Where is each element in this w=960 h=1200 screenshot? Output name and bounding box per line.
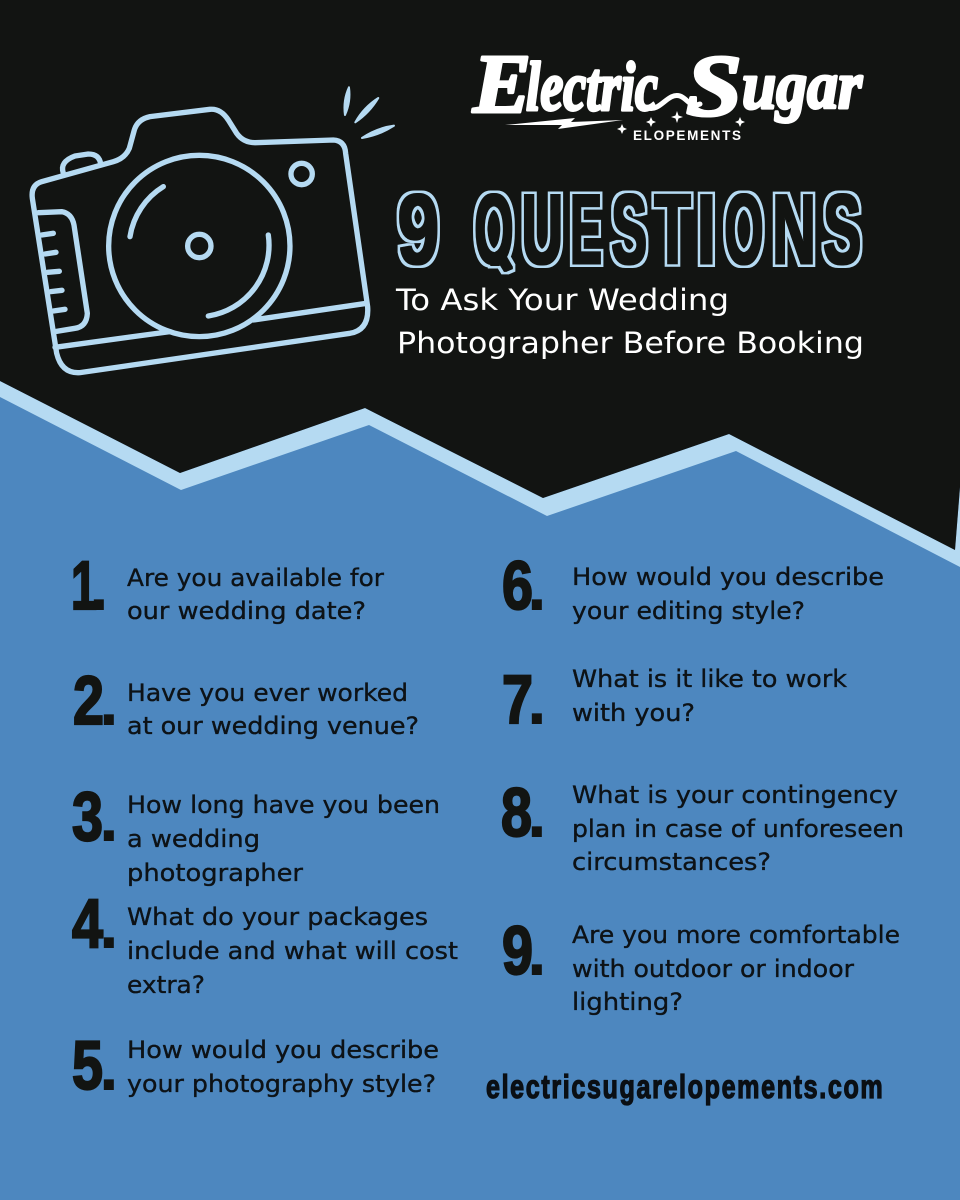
question 1: our wedding date?: [127, 597, 366, 625]
question 9: with outdoor or indoor: [572, 955, 854, 983]
question 9: lighting?: [572, 988, 683, 1016]
title: 9 QUESTIONS: S: [611, 174, 647, 285]
question 5: [72, 1027, 439, 1106]
question 3: a wedding: [127, 825, 260, 853]
subtitle: To Ask Your Wedding: [395, 283, 729, 317]
question 4: 4: [72, 885, 103, 962]
question 7: [502, 661, 847, 740]
logo: Electric Sugar Elopements: ugar: [742, 47, 862, 123]
question 2: 2: [73, 662, 104, 739]
question 8: [501, 774, 904, 876]
question 7: .: [527, 661, 547, 740]
question 6: [502, 547, 884, 626]
question 7: 7: [502, 661, 533, 738]
logo: Electric Sugar Elopements: lectric: [526, 49, 658, 126]
logo: Electric Sugar Elopements: ELOPEMENTS: [633, 128, 741, 143]
question 4: [72, 885, 458, 999]
title: 9 QUESTIONS: [396, 190, 862, 274]
question 9: 9: [502, 912, 533, 989]
question 6: How would you describe: [572, 563, 884, 591]
logo: Electric Sugar Elopements: E: [472, 38, 531, 131]
website url: electricsugarelopements.com: [486, 1069, 883, 1106]
question 3: photographer: [127, 859, 303, 887]
title: 9 QUESTIONS: N: [772, 175, 816, 285]
question 7: What is it like to work: [572, 665, 847, 693]
icon: camera: [32, 87, 394, 373]
question 8: What is your contingency: [572, 781, 898, 809]
question 7: with you?: [572, 699, 695, 727]
title: 9 QUESTIONS: E: [570, 175, 602, 285]
question 5: How would you describe: [127, 1036, 439, 1064]
subtitle: [395, 283, 864, 360]
question 5: 5: [72, 1027, 103, 1104]
question 1: .: [89, 547, 109, 626]
question 2: [73, 662, 419, 741]
question 2: Have you ever worked: [127, 679, 408, 707]
question 8: circumstances?: [572, 848, 771, 876]
question 8: .: [527, 774, 547, 853]
question 6: 6: [502, 547, 533, 624]
question 9: Are you more comfortable: [572, 921, 900, 949]
question 3: How long have you been: [127, 791, 440, 819]
question 8: plan in case of unforeseen: [572, 815, 904, 843]
question 4: include and what will cost: [127, 937, 458, 965]
question 3: 3: [72, 778, 103, 855]
question 6: .: [527, 547, 547, 626]
question 2: .: [99, 662, 119, 741]
question 1: Are you available for: [127, 564, 384, 592]
zigzag light band: [0, 381, 960, 567]
title: 9 QUESTIONS: U: [522, 175, 563, 286]
question 4: extra?: [127, 971, 205, 999]
question 9: [502, 912, 900, 1016]
title: 9 QUESTIONS: S: [823, 175, 861, 286]
question 3: [72, 778, 440, 887]
question 5: your photography style?: [127, 1070, 436, 1098]
question 8: 8: [501, 774, 532, 851]
logo: Electric Sugar Elopements: S: [686, 38, 742, 135]
title: 9 QUESTIONS: T: [654, 175, 691, 285]
question 1: 1: [71, 547, 97, 624]
title: 9 QUESTIONS: I: [696, 175, 716, 285]
question 2: at our wedding venue?: [127, 712, 419, 740]
title: 9 QUESTIONS: 9: [398, 173, 439, 285]
title: 9 QUESTIONS: O: [724, 174, 763, 285]
logo: Electric Sugar Elopements: [472, 38, 862, 143]
question 3: .: [99, 778, 119, 857]
question 4: .: [99, 885, 119, 964]
dark header panel: [0, 0, 960, 550]
title: 9 QUESTIONS: Q: [474, 174, 513, 285]
subtitle: Photographer Before Booking: [397, 326, 864, 360]
question 6: your editing style?: [572, 597, 805, 625]
question 9: .: [527, 912, 547, 991]
question 4: What do your packages: [127, 903, 428, 931]
question 5: .: [99, 1027, 119, 1106]
question 1: [71, 547, 384, 626]
